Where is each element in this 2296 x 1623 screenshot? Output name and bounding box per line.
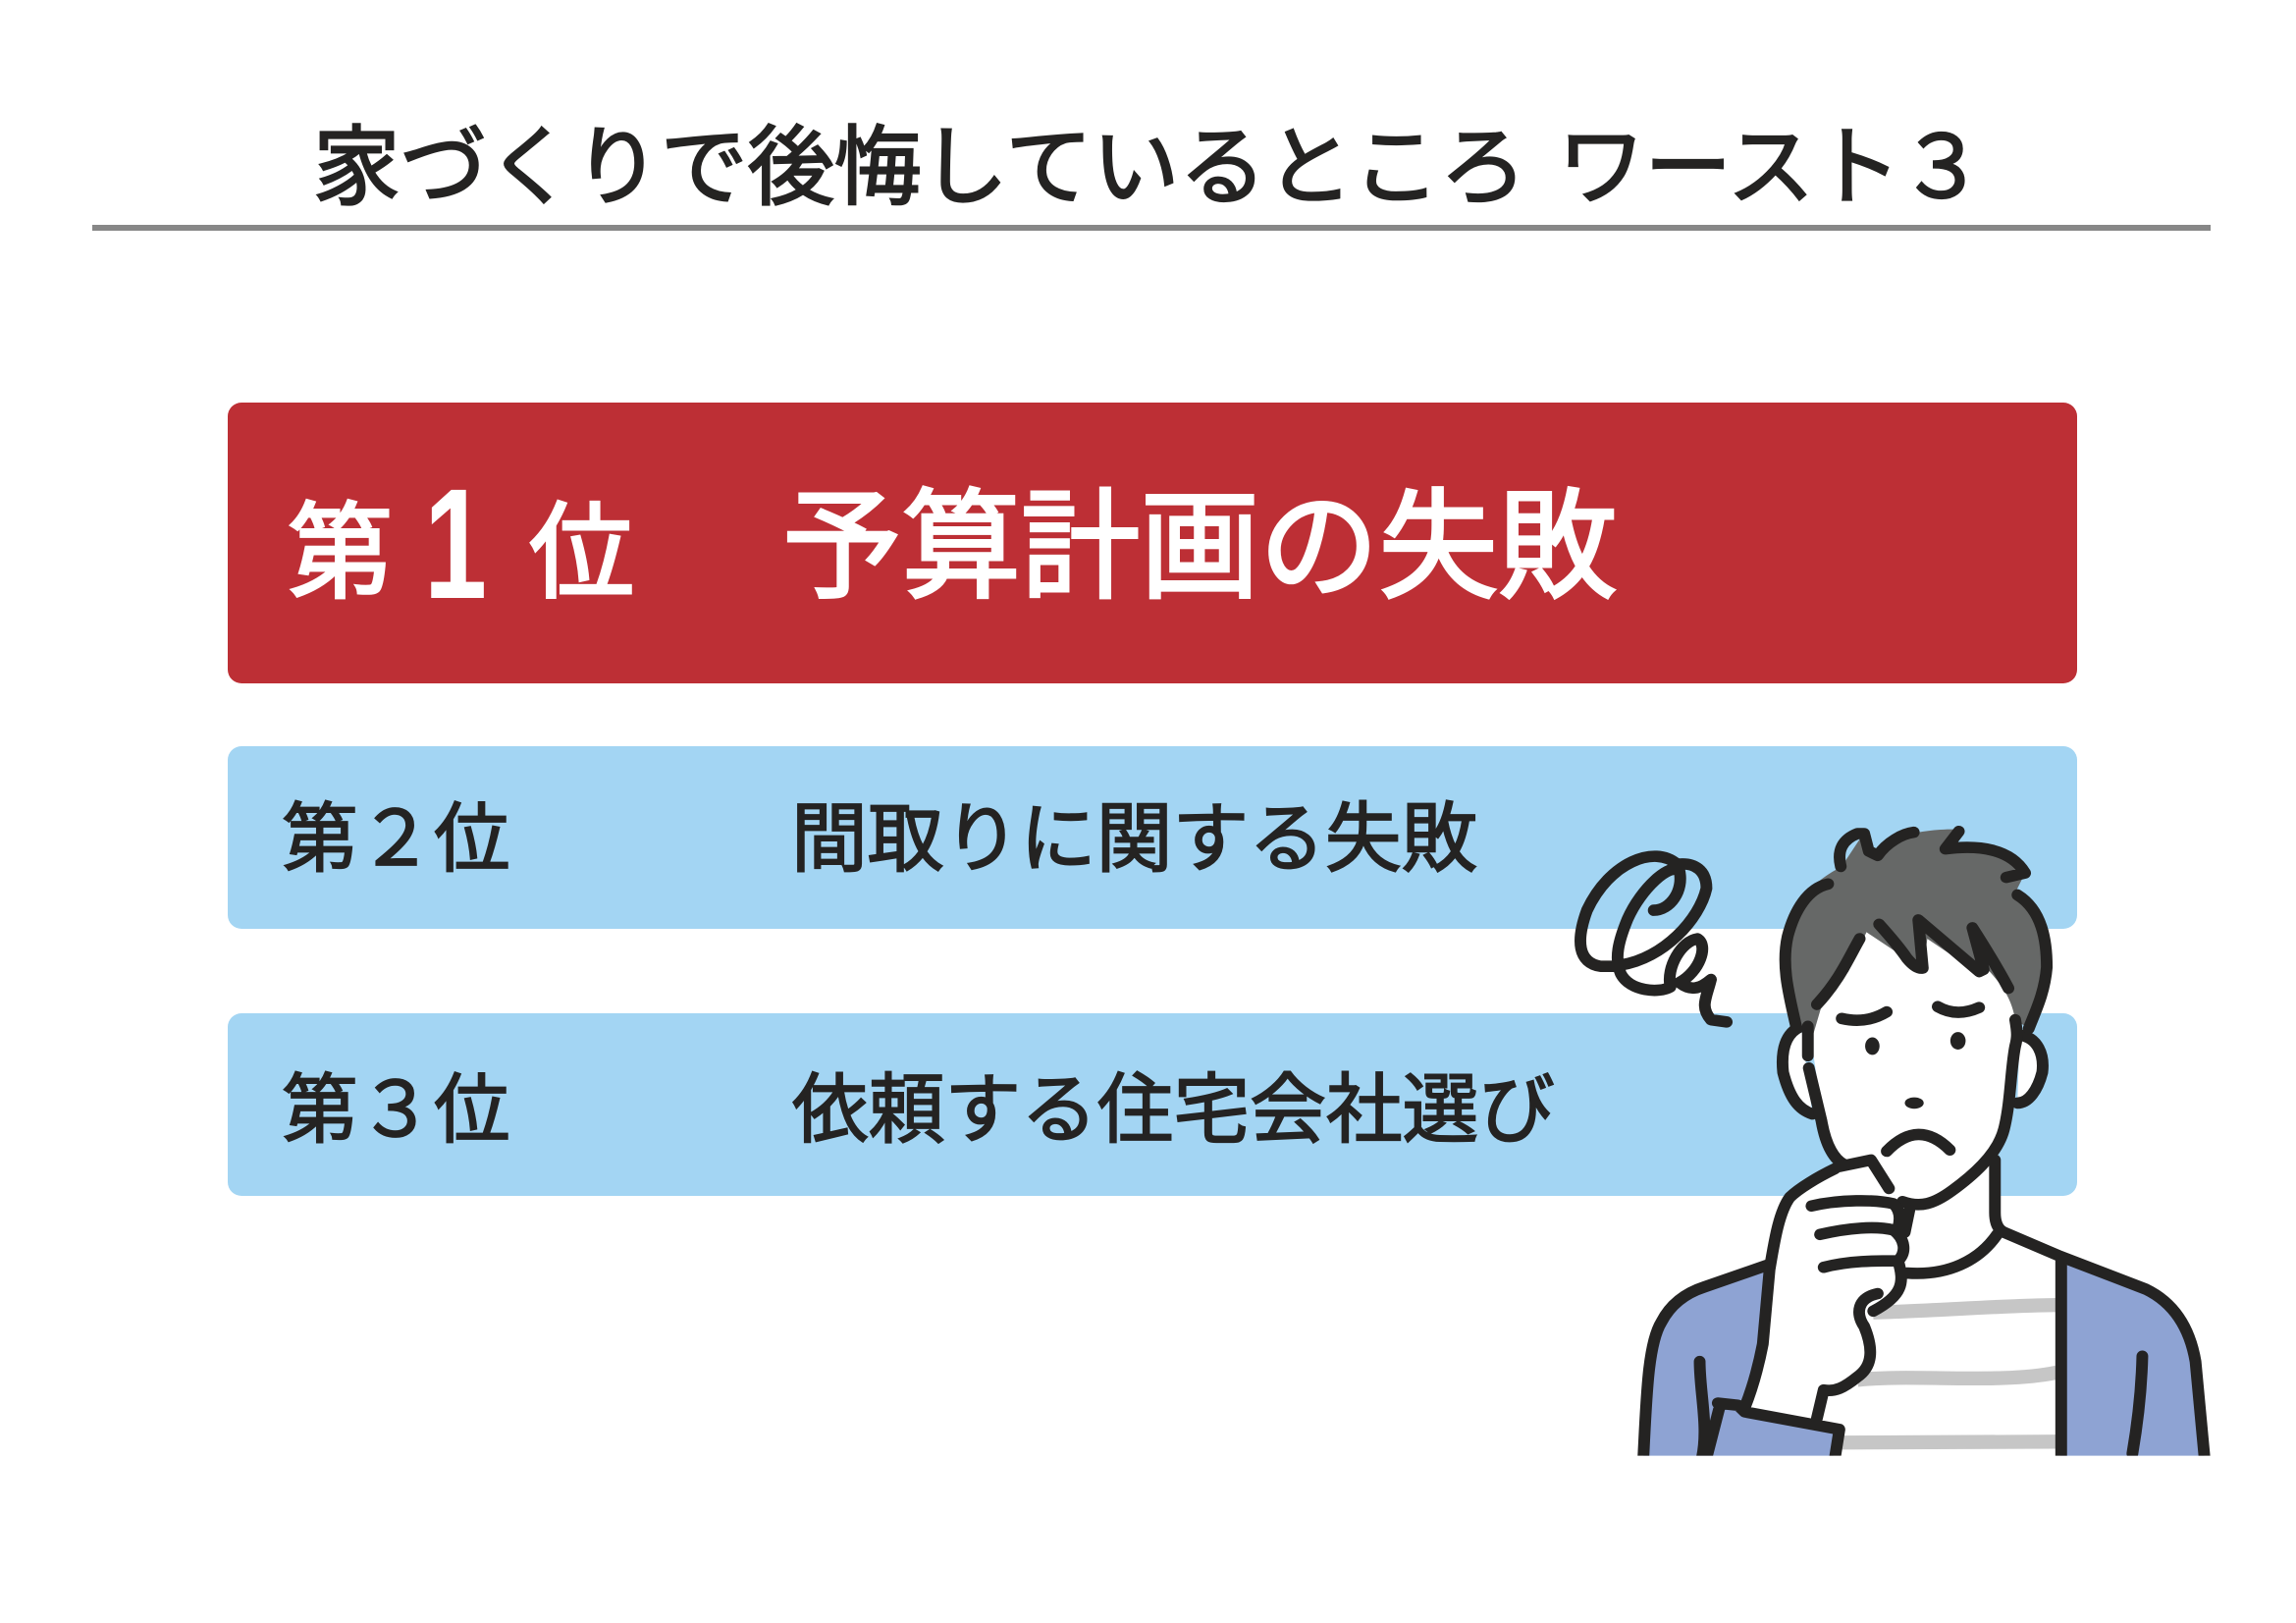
icon: confused scribble [1580,856,1727,1022]
rank 3 text: 依頼する住宅会社選び [792,1049,1555,1159]
panel: rank 1 [228,403,2077,683]
rank 3 label: 第３位 [282,1049,510,1159]
rank 1 text: 予算計画の失敗 [782,450,1618,622]
ears [1783,1026,2043,1114]
title: 家づくりで後悔しているところ [313,97,1526,223]
face and neck skin [1814,1013,2014,1196]
title: ３ [1898,97,1986,223]
panel: rank 2 [228,746,2077,929]
rank 1 label: 第 [288,467,393,620]
title rule [92,225,2211,231]
shirt [1840,1243,2062,1458]
icon: worried man [1575,826,2211,1456]
rank 1 label: 位 [529,467,634,620]
rank 1 label [288,456,634,631]
jacket [1643,1259,2205,1458]
title: ワースト [1558,97,1901,223]
shirt stripes [1842,1305,2056,1442]
hand [1800,1171,1895,1196]
rank 2 text: 間取りに関する失敗 [791,778,1477,888]
rank 1 label: 1 [424,456,487,631]
body and hand lines [1643,1160,2205,1458]
hair [1784,830,2047,1037]
rank 2 label: 第２位 [282,778,510,888]
panel: rank 3 [228,1013,2077,1196]
facial features [1842,1006,1979,1151]
hair lines [1786,832,2047,1205]
